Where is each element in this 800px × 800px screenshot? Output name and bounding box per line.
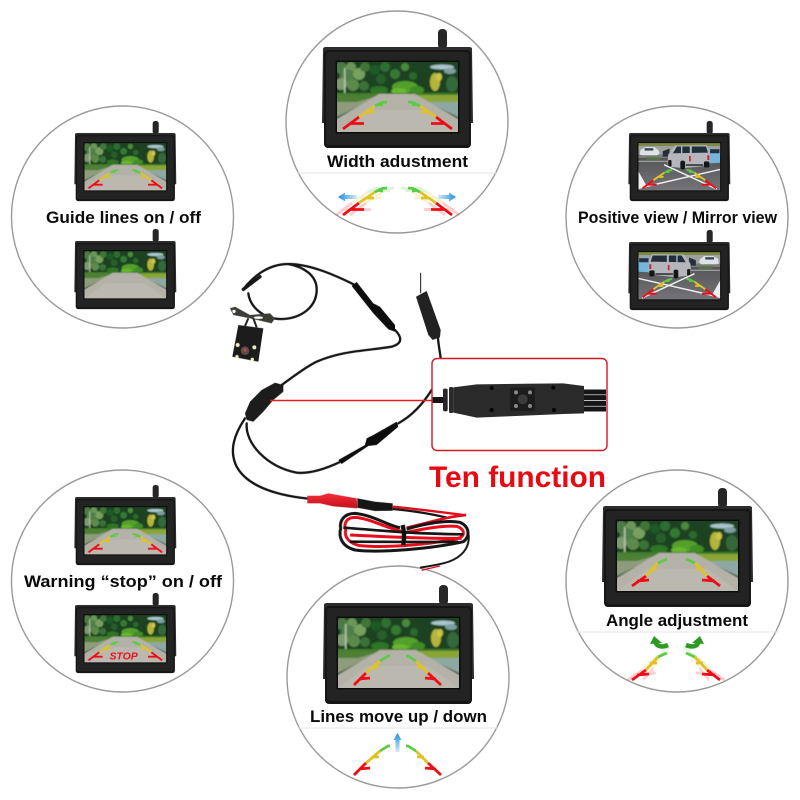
- icon: green curved arrows: [650, 636, 704, 646]
- red power plug: [307, 493, 393, 511]
- callout: enlarged switch module: [432, 358, 607, 450]
- inline connector: camera cable: [352, 282, 395, 332]
- red and black power wire coil: [340, 507, 469, 570]
- label: warning stop: Warning “stop” on / off: [24, 572, 222, 591]
- panel: width adjustment: [286, 11, 508, 233]
- module enlarged detail: [433, 383, 606, 418]
- mounting bracket: [230, 307, 275, 323]
- wireless antenna module: [416, 291, 441, 340]
- diagram: guide lines moving outward: [336, 188, 459, 215]
- diagram: guide lines angle change: [628, 636, 724, 680]
- monitor: mirror view: [628, 230, 730, 310]
- monitor: stop off: [74, 485, 176, 565]
- label: lines move: Lines move up / down: [310, 707, 487, 726]
- callout: red leader line: [270, 400, 433, 402]
- monitor: width adjustment: [322, 29, 473, 148]
- monitor: angle adjustment: [602, 488, 753, 607]
- monitor: guide lines off: [74, 229, 176, 309]
- monitor: guide lines on: [74, 121, 176, 201]
- panel: guide lines on / off: [12, 106, 234, 328]
- stop warning text: STOP: [109, 652, 138, 663]
- diagram: guide lines moving up: [354, 733, 441, 775]
- cables: [233, 264, 441, 499]
- label: width adjustment: Width adustment: [327, 152, 468, 171]
- monitor: stop on: [74, 593, 176, 673]
- inline connector: lower cable: [338, 422, 398, 464]
- panel: lines move up / down: [287, 566, 509, 788]
- panel: angle adjustment: [566, 470, 788, 692]
- label: guide lines: Guide lines on / off: [46, 208, 201, 227]
- monitor: lines move: [323, 585, 474, 704]
- panel: warning stop on / off: [12, 470, 234, 692]
- camera head: [232, 325, 263, 362]
- label: positive / mirror: Positive view / Mirror view: [578, 208, 778, 227]
- panel: positive / mirror view: [566, 106, 788, 328]
- monitor: positive view: [628, 121, 730, 201]
- camera and cable assembly: [230, 264, 469, 570]
- label: angle adjustment: Angle adjustment: [606, 611, 748, 630]
- function switch module: [245, 383, 283, 422]
- heading: Ten function: Ten function: [429, 461, 606, 494]
